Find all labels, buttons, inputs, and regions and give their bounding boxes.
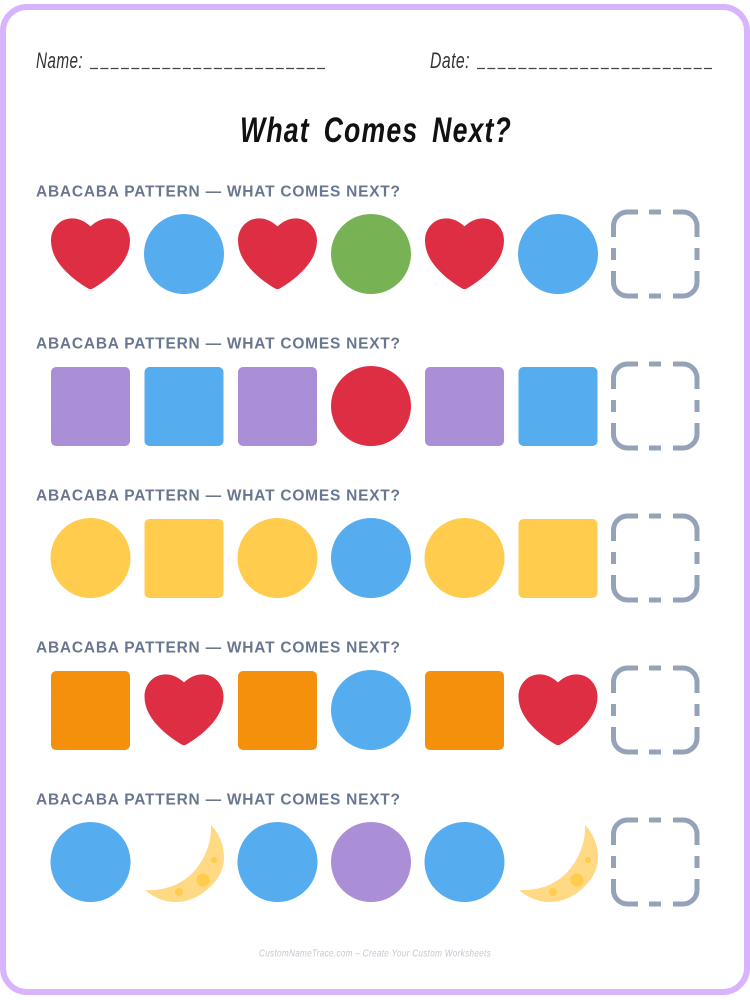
yellow circle — [238, 518, 318, 598]
green circle — [331, 214, 411, 294]
empty answer box — [614, 364, 697, 448]
row 5 label: ABACABA PATTERN — WHAT COMES NEXT? — [36, 792, 400, 808]
blue square — [144, 367, 224, 446]
row 1 — [36, 184, 697, 296]
row 2 label: ABACABA PATTERN — WHAT COMES NEXT? — [36, 336, 400, 352]
blue square — [518, 367, 598, 446]
blue circle — [331, 518, 411, 598]
row 5 — [36, 792, 697, 904]
empty answer box — [614, 516, 697, 600]
heart — [144, 674, 224, 745]
orange square — [238, 671, 317, 750]
heart — [51, 218, 130, 289]
date field: Date: — [430, 48, 470, 73]
empty answer box — [614, 820, 697, 904]
blue circle — [331, 670, 411, 750]
row 3 — [36, 488, 697, 600]
crescent moon — [145, 825, 224, 902]
purple square — [51, 367, 130, 446]
heart — [425, 218, 504, 289]
row 4 label: ABACABA PATTERN — WHAT COMES NEXT? — [36, 640, 400, 656]
heart — [238, 218, 317, 289]
row 4 — [36, 640, 697, 752]
yellow circle — [424, 518, 504, 598]
orange square — [51, 671, 130, 750]
yellow square — [518, 519, 598, 598]
row 2 — [36, 336, 697, 448]
empty answer box — [614, 212, 697, 296]
red circle — [331, 366, 411, 446]
row 3 label: ABACABA PATTERN — WHAT COMES NEXT? — [36, 488, 400, 504]
blue circle — [238, 822, 318, 902]
purple circle — [331, 822, 411, 902]
name field: Name: — [36, 48, 83, 73]
purple square — [238, 367, 317, 446]
orange square — [425, 671, 504, 750]
footer credit: CustomNameTrace.com – Create Your Custom Worksheets — [259, 948, 491, 960]
blue circle — [144, 214, 224, 294]
yellow circle — [50, 518, 130, 598]
heart — [518, 674, 598, 745]
empty answer box — [614, 668, 697, 752]
title: What Comes Next? — [240, 111, 512, 150]
row 1 label: ABACABA PATTERN — WHAT COMES NEXT? — [36, 184, 400, 200]
crescent moon — [519, 825, 598, 902]
blue circle — [424, 822, 504, 902]
blue circle — [518, 214, 598, 294]
purple square — [425, 367, 504, 446]
blue circle — [50, 822, 130, 902]
yellow square — [144, 519, 224, 598]
